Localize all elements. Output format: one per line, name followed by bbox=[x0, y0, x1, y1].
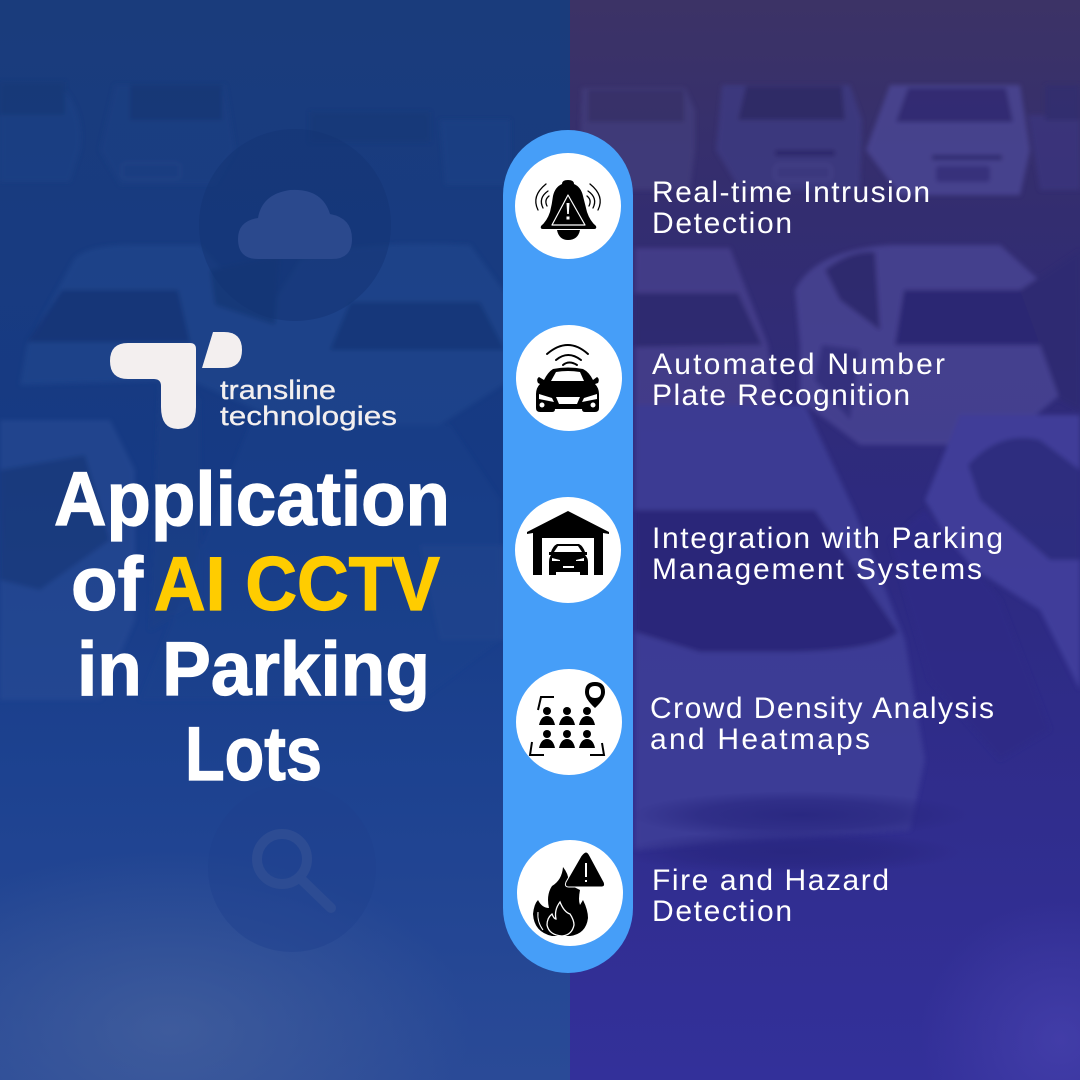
panel: blue vertical pill bbox=[503, 130, 633, 973]
title: Lots bbox=[185, 712, 322, 797]
title bbox=[54, 457, 450, 797]
background: right purple panel with parking photo bbox=[570, 0, 1080, 1080]
logo wordmark: technologies bbox=[220, 401, 397, 431]
text: integration with parking management systems: Management Systems bbox=[652, 553, 982, 586]
title: Application bbox=[54, 457, 450, 542]
title: of bbox=[71, 542, 144, 627]
text: real-time intrusion detection bbox=[652, 176, 930, 240]
text: crowd density analysis and heatmaps: Crowd Density Analysis bbox=[650, 692, 994, 725]
icon: faint cloud in circle bbox=[202, 190, 389, 321]
text: automated number plate recognition: Plate Recognition bbox=[652, 379, 910, 412]
icon: fire with warning triangle bbox=[517, 840, 623, 946]
icon: alarm bell with warning bbox=[515, 153, 621, 259]
text: fire and hazard detection: Detection bbox=[652, 895, 792, 928]
logo wordmark bbox=[220, 375, 397, 431]
background: left blue panel with parking photo bbox=[0, 0, 570, 1080]
title: AI CCTV bbox=[154, 542, 440, 627]
text: fire and hazard detection: Fire and Hazard bbox=[652, 864, 889, 897]
text: automated number plate recognition bbox=[652, 348, 945, 412]
title: in Parking bbox=[77, 627, 430, 712]
icon: garage with car bbox=[515, 497, 621, 603]
text: integration with parking management systems: Integration with Parking bbox=[652, 522, 1003, 555]
text: crowd density analysis and heatmaps: and Heatmaps bbox=[650, 723, 870, 756]
text: integration with parking management systems bbox=[652, 522, 1003, 586]
icon: faint magnifying glass in circle bbox=[252, 829, 332, 904]
text: automated number plate recognition: Automated Number bbox=[652, 348, 945, 381]
logo wordmark: transline bbox=[220, 375, 336, 405]
logo mark bbox=[110, 332, 242, 429]
icon: car with wireless signal bbox=[516, 325, 622, 431]
text: real-time intrusion detection: Real-time Intrusion bbox=[652, 176, 930, 209]
text: fire and hazard detection bbox=[652, 864, 889, 928]
text: crowd density analysis and heatmaps bbox=[650, 692, 994, 756]
text: real-time intrusion detection: Detection bbox=[652, 207, 792, 240]
logo: transline technologies bbox=[110, 332, 397, 431]
icon: crowd with location pin bbox=[516, 669, 622, 775]
